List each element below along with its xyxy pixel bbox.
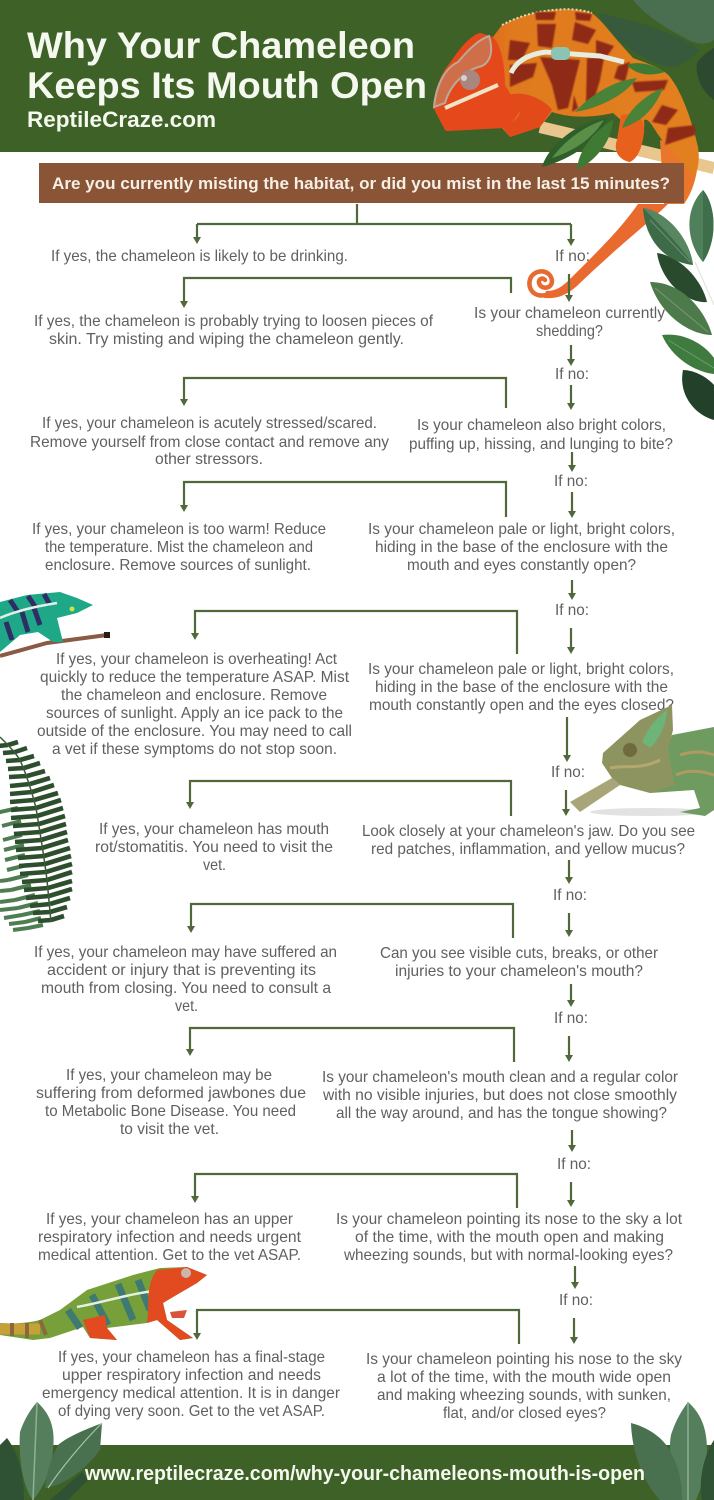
flowchart text: questions and if-no labels: If no: [551,764,585,781]
title: Keeps Its Mouth Open [27,65,427,106]
teal spot [551,47,570,60]
flowchart text: questions and if-no labels: Is your chameleon pale or light, bright colors, [368,521,675,538]
flowchart text: questions and if-no labels: Can you see visible cuts, breaks, or other [380,945,659,962]
flowchart text: questions and if-no labels: all the way around, and has the tongue showing? [336,1105,667,1122]
footer url: www.reptilecraze.com/why-your-chameleons-mouth-is-open [84,1463,645,1485]
title: ReptileCraze.com [27,107,216,132]
illustration: veiled chameleon [570,705,714,816]
illustration: top right dark leaves [598,0,714,100]
flowchart text: questions and if-no labels: Is your chameleon's mouth clean and a regular color [322,1069,679,1086]
flowchart text: yes outcomes: enclosure. Remove sources of sunlight. [45,557,311,574]
flowchart text: yes outcomes: If yes, your chameleon has mouth [99,821,329,838]
flowchart text: yes outcomes: the chameleon and enclosure. Remove [61,687,327,704]
flowchart text: yes outcomes: quickly to reduce the temperature ASAP. Mist [40,669,350,686]
flowchart text: questions and if-no labels: hiding in the base of the enclosure with the [375,539,668,556]
flowchart text: questions and if-no labels: Is your chameleon currently [474,305,665,322]
illustration: fern [0,737,72,930]
illustration: orange panther chameleon [433,9,699,204]
illustration: teal chameleon on branch [0,592,110,656]
flowchart text: yes outcomes: If yes, the chameleon is probably trying to loosen pieces of [34,313,434,330]
flowchart text: yes outcomes: mouth from closing. You need to consult a [41,980,331,997]
flowchart text: questions and if-no labels: If no: [555,248,590,265]
crest [502,9,592,25]
flowchart text: questions and if-no labels: and making wheezing sounds, with sunken, [377,1387,671,1404]
footer band [0,1445,714,1500]
illustration: bottom right leaves [631,1402,714,1500]
flowchart text: questions and if-no labels: If no: [559,1292,593,1309]
flowchart text: questions and if-no labels: flat, and/or closed eyes? [443,1405,606,1422]
flowchart text: questions and if-no labels: If no: [554,473,588,490]
title [27,25,427,132]
flowchart text: questions and if-no labels: wheezing sounds, but with normal-looking eyes? [343,1247,673,1264]
mouth line [445,85,498,108]
flowchart text: questions and if-no labels: puffing up, hissing, and lunging to bite? [409,436,673,453]
teal bands [68,1280,150,1328]
flowchart text: questions and if-no labels: If no: [557,1156,591,1173]
illustration: small leaves over branch [542,63,665,170]
flowchart text: yes outcomes: If yes, your chameleon has a final-stage [58,1349,325,1366]
front leg [503,94,552,137]
flowchart text: questions and if-no labels: shedding? [536,323,603,340]
flowchart text: yes outcomes: suffering from deformed jawbones due [36,1085,306,1102]
flowchart text: yes outcomes: emergency medical attention. It is in danger [42,1385,341,1402]
tail bands [0,1324,40,1334]
head [433,33,520,131]
flowchart text: questions and if-no labels: If no: [554,1010,588,1027]
flowchart text: yes outcomes: upper respiratory infection and needs [62,1367,321,1384]
illustration: rainbow panther chameleon [0,1267,207,1340]
flowchart text: yes outcomes: skin. Try misting and wiping the chameleon gently. [49,331,404,348]
flowchart text: yes outcomes: If yes, your chameleon has an upper [46,1211,294,1228]
flowchart text: questions and if-no labels: If no: [555,366,589,383]
head and casque [602,705,675,793]
flowchart text: questions and if-no labels: Is your chameleon pale or light, bright colors, [368,661,674,678]
flowchart text: yes outcomes: a vet if these symptoms do not stop soon. [52,741,337,758]
flowchart text: yes outcomes: medical attention. Get to the vet ASAP. [38,1247,301,1264]
eye [460,70,480,90]
front leg [570,778,620,812]
illustration: right side leaves [643,190,714,420]
flowchart text: questions and if-no labels: Is your chameleon pointing its nose to the sky a lot [336,1211,683,1228]
pale lateral stripe [511,52,624,73]
pale stripe [77,1290,163,1307]
flowchart text: yes outcomes [30,248,434,1420]
flowchart connectors and arrows [180,204,579,1344]
flowchart text: yes outcomes: If yes, your chameleon may be [66,1067,272,1084]
lower tail behind body [660,140,698,204]
flowchart text: questions and if-no labels: red patches, inflammation, and yellow mucus? [371,841,685,858]
flowchart text: questions and if-no labels: a lot of the time, with the mouth wide open [377,1369,671,1386]
flowchart text: questions and if-no labels: If no: [555,602,589,619]
flowchart text: yes outcomes: If yes, your chameleon is too warm! Reduce [32,521,326,538]
flowchart text: questions and if-no labels: injuries to your chameleon's mouth? [395,963,643,980]
flowchart text: yes outcomes: outside of the enclosure. You may need to call [37,723,352,740]
body and tail [0,1267,207,1340]
title: Why Your Chameleon [27,25,415,66]
red hind leg [83,1315,117,1340]
dark stripes and blotches [508,12,695,145]
flowchart text: yes outcomes: of dying very soon. Get to the vet ASAP. [58,1403,325,1420]
illustration: tail with curl [529,204,668,298]
flowchart text: questions and if-no labels: mouth constantly open and the eyes closed? [369,697,674,714]
illustration: bottom left leaves [0,1402,102,1500]
illustration: branch [540,127,714,168]
flowchart text: questions and if-no labels: If no: [553,887,587,904]
flowchart text: yes outcomes: the temperature. Mist the chameleon and [45,539,313,556]
flowchart text: yes outcomes: Remove yourself from close contact and remove any [30,434,389,451]
flowchart text: yes outcomes: If yes, your chameleon may have suffered an [34,944,337,961]
flowchart text: yes outcomes: If yes, the chameleon is likely to be drinking. [51,248,348,265]
flowchart text: yes outcomes: If yes, your chameleon is acutely stressed/scared. [42,415,377,432]
flowchart text: yes outcomes: If yes, your chameleon is overheating! Act [56,651,338,668]
flowchart text: yes outcomes: other stressors. [155,451,263,468]
flowchart text: yes outcomes: to Metabolic Bone Disease. You need [45,1103,296,1120]
flowchart text: questions and if-no labels: of the time, with the mouth open and making [355,1229,664,1246]
flowchart text: questions and if-no labels: hiding in the base of the enclosure with the [375,679,668,696]
flowchart text: yes outcomes: to visit the vet. [120,1121,219,1138]
header band [0,0,714,152]
flowchart text: yes outcomes: vet. [203,857,226,874]
flowchart text: yes outcomes: respiratory infection and needs urgent [38,1229,302,1246]
red head and foreleg [147,1267,207,1340]
back leg and body [650,727,714,816]
flowchart text: questions and if-no labels: Look closely at your chameleon's jaw. Do you see [362,823,695,840]
flowchart text: questions and if-no labels: with no visible injuries, but does not close smoothly [322,1087,677,1104]
body [433,9,699,178]
flowchart text: questions and if-no labels: mouth and eyes constantly open? [407,557,636,574]
flowchart text: yes outcomes: accident or injury that is preventing its [47,962,316,979]
flowchart text: yes outcomes: sources of sunlight. Apply an ice pack to the [46,705,343,722]
flowchart text: yes outcomes: rot/stomatitis. You need to visit the [95,839,333,856]
main question banner: Are you currently misting the habitat, or did you mist in the last 15 minutes? [52,174,670,193]
flowchart text: questions and if-no labels: Is your chameleon pointing his nose to the sky [366,1351,682,1368]
flowchart text: yes outcomes: vet. [175,998,198,1015]
flowchart text: questions and if-no labels: Is your chameleon also bright colors, [417,417,666,434]
main question banner [39,163,684,203]
casque [434,36,491,107]
flowchart text: questions and if-no labels [322,248,695,1422]
